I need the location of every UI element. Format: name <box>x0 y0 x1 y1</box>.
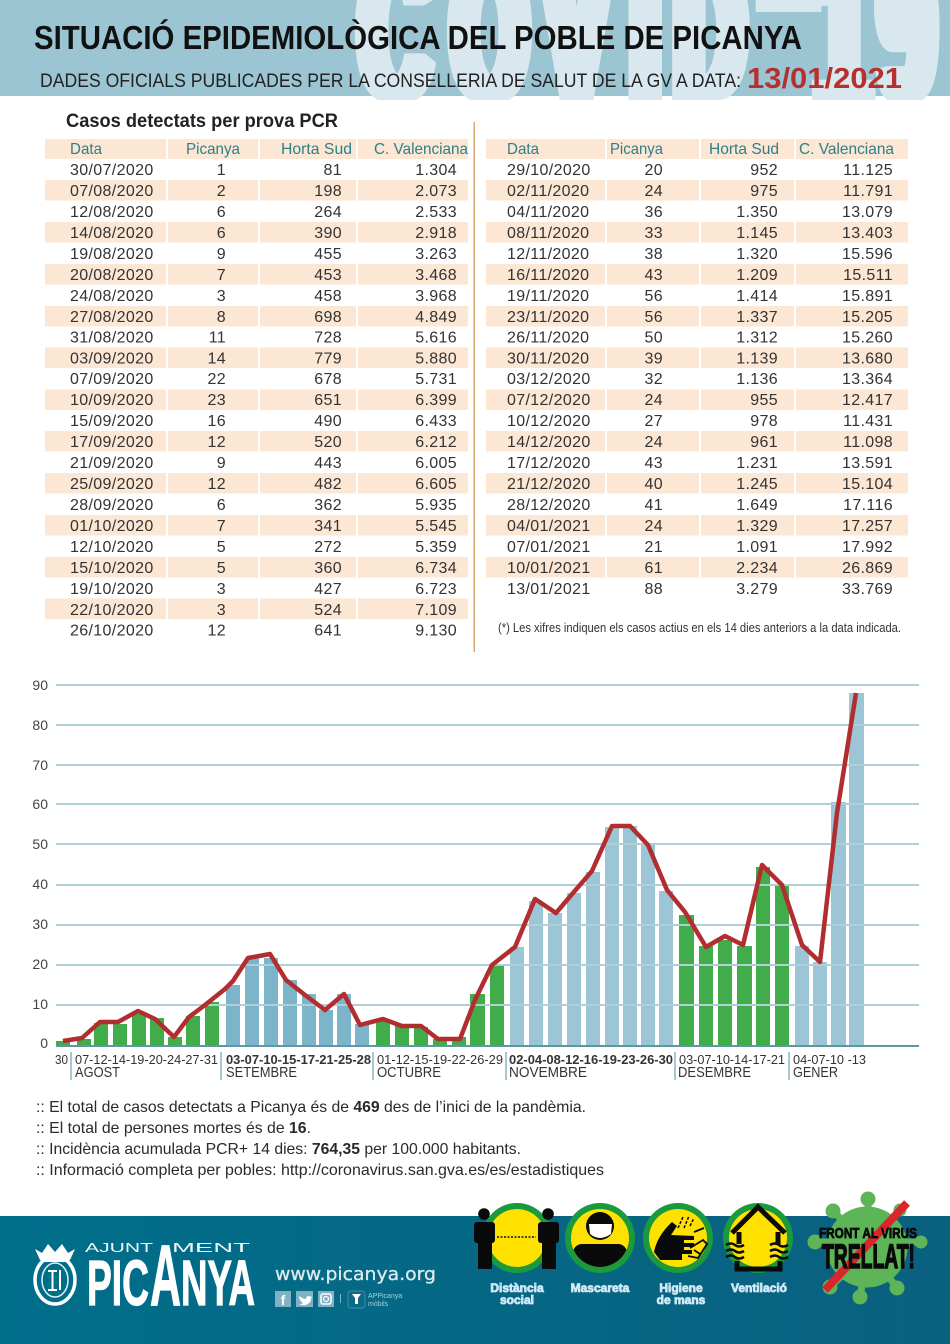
x axis labels: OCTUBRE <box>377 1064 441 1081</box>
icon: ventilation <box>723 1203 793 1273</box>
x axis labels: 30 <box>55 1052 68 1067</box>
x axis labels: SETEMBRE <box>226 1064 297 1081</box>
left table: 5 <box>217 560 226 577</box>
right table: 15.104 <box>842 476 893 493</box>
right table: 15.511 <box>843 267 893 284</box>
right table: 1.320 <box>736 246 778 263</box>
left table: 362 <box>314 497 342 514</box>
left table: 9.130 <box>415 622 457 640</box>
right table: 13/01/2021 <box>507 581 591 598</box>
logo: wordmark: NYA <box>181 1247 255 1319</box>
chart <box>32 677 919 1081</box>
left table: 698 <box>314 309 342 326</box>
left table: 3.263 <box>415 246 457 263</box>
right table: 21 <box>644 539 663 556</box>
right table: 28/12/2020 <box>507 497 591 514</box>
right table <box>486 139 908 598</box>
left table: 8 <box>217 309 226 326</box>
left table: 26/10/2020 <box>70 622 154 640</box>
right table: 43 <box>644 267 663 284</box>
right table: 20 <box>644 162 663 179</box>
left table: 390 <box>314 225 342 242</box>
right table: 13.364 <box>842 371 893 388</box>
left table: 2.533 <box>415 204 457 221</box>
background word COVID-19 <box>354 0 940 100</box>
left table: 21/09/2020 <box>70 455 154 472</box>
left table: 24/08/2020 <box>70 288 154 305</box>
left table: 25/09/2020 <box>70 476 154 493</box>
label: higiene de mans: de mans <box>657 1293 706 1307</box>
left table: 6.433 <box>415 413 457 430</box>
right table: 50 <box>644 330 663 346</box>
right table: 33 <box>644 225 663 242</box>
left table: 5.731 <box>415 371 457 388</box>
logo: wordmark: MENT <box>172 1241 251 1255</box>
icon: mask <box>565 1203 635 1274</box>
left table: 6.005 <box>415 455 457 472</box>
right table: 11.098 <box>843 434 893 451</box>
left table: 9 <box>217 455 226 472</box>
left table: 7 <box>217 267 226 284</box>
right table: 1.091 <box>736 539 778 556</box>
notes: :: Incidència acumulada PCR+ 14 dies: 764,35 per 100.000 habitants. <box>36 1141 521 1158</box>
left table: Data <box>70 141 102 158</box>
right table: 29/10/2020 <box>507 162 591 179</box>
left table: 2.918 <box>415 225 457 242</box>
left table: 2 <box>217 183 226 200</box>
right table: 15.205 <box>842 309 893 326</box>
right table: 15.596 <box>842 246 893 263</box>
left table: 17/09/2020 <box>70 434 154 451</box>
right table: 56 <box>644 288 663 305</box>
x axis labels <box>55 1052 866 1081</box>
left table: Horta Sud <box>281 141 352 158</box>
right table: 40 <box>644 476 663 493</box>
left table: 455 <box>314 246 342 263</box>
left table: 11 <box>209 330 226 346</box>
right table: 88 <box>644 581 663 598</box>
x axis labels: AGOST <box>75 1064 120 1081</box>
left table: 7.109 <box>415 602 457 619</box>
left table: 5 <box>217 539 226 556</box>
left table: 5.545 <box>415 518 457 535</box>
left table: C. Valenciana <box>374 141 468 158</box>
right table: 978 <box>750 413 778 430</box>
left table: 16 <box>208 413 226 430</box>
left table: 6.605 <box>415 476 457 493</box>
right table: 10/12/2020 <box>507 413 591 430</box>
x axis labels: 03-07-10-14-17-21 <box>679 1052 785 1067</box>
right table: C. Valenciana <box>799 141 894 158</box>
left table: 12/08/2020 <box>70 204 154 221</box>
right table: 26.869 <box>842 560 893 577</box>
right table: 32 <box>644 371 663 388</box>
right table: 11.791 <box>843 183 893 200</box>
left table: 15/09/2020 <box>70 413 154 430</box>
left table: 360 <box>314 560 342 577</box>
left table: 81 <box>324 162 342 179</box>
left table <box>45 139 468 640</box>
left table: 12 <box>208 622 226 640</box>
right table: 15.260 <box>842 330 893 346</box>
left table: 3 <box>217 288 226 305</box>
right table: 13.079 <box>842 204 893 221</box>
bars: December <box>679 867 789 1045</box>
left table: 779 <box>314 350 342 368</box>
x axis labels: GENER <box>793 1064 838 1081</box>
right table: 61 <box>644 560 663 577</box>
y axis labels: 20 <box>32 956 48 972</box>
left table: 490 <box>314 413 342 430</box>
left table: 524 <box>314 602 342 619</box>
right table: 1.649 <box>736 497 778 514</box>
social icons: f <box>281 1292 286 1308</box>
right table: 13.403 <box>842 225 893 242</box>
right table: 1.209 <box>736 267 778 284</box>
logo: wordmark: AJUNT <box>85 1241 154 1255</box>
left table: 19/10/2020 <box>70 581 154 598</box>
left table: 5.935 <box>415 497 457 514</box>
label: ventilació: Ventilació <box>731 1281 787 1295</box>
left table: 22/10/2020 <box>70 602 154 619</box>
left table: 6.723 <box>415 581 457 598</box>
left table: 6.734 <box>415 560 457 577</box>
left table: 3 <box>217 602 226 619</box>
left table: 6 <box>217 225 226 242</box>
label: distància social <box>490 1281 544 1307</box>
left table: 15/10/2020 <box>70 560 154 577</box>
x axis labels: 04-07-10 -13 <box>793 1052 866 1067</box>
notes: :: Informació completa per pobles: http://coronavirus.san.gva.es/es/estadistiques <box>36 1162 604 1179</box>
left table: 6 <box>217 497 226 514</box>
x axis labels: DESEMBRE <box>678 1064 751 1081</box>
left table: 5.880 <box>415 350 457 368</box>
logo: wordmark: PIC <box>87 1247 149 1319</box>
left table: 07/08/2020 <box>70 183 154 200</box>
right table: 975 <box>750 183 778 200</box>
y axis labels: 80 <box>32 717 48 733</box>
right table: 41 <box>644 497 663 514</box>
bars: September <box>226 958 369 1045</box>
bars: October <box>376 965 504 1045</box>
right table: 30/11/2020 <box>507 350 589 368</box>
right table: 23/11/2020 <box>507 309 589 326</box>
bars: November <box>510 826 673 1045</box>
left table: 03/09/2020 <box>70 350 154 368</box>
left table: 641 <box>314 622 342 640</box>
left table: 27/08/2020 <box>70 309 154 326</box>
right table: 24 <box>644 392 663 409</box>
x axis labels: NOVEMBRE <box>509 1064 587 1081</box>
icon: hand hygiene <box>643 1203 713 1273</box>
right table: 952 <box>750 162 778 179</box>
right table: 19/11/2020 <box>507 288 589 305</box>
logo: wordmark: A <box>150 1228 181 1324</box>
right table: 17.116 <box>843 497 893 514</box>
right table: Picanya <box>610 141 663 158</box>
left table: 01/10/2020 <box>70 518 154 535</box>
right table: 17/12/2020 <box>507 455 591 472</box>
header band <box>0 0 950 100</box>
right table: 16/11/2020 <box>507 267 589 284</box>
y axis labels: 70 <box>32 757 48 773</box>
right table: 13.591 <box>842 455 893 472</box>
left table: 12 <box>208 434 226 451</box>
right table: 04/11/2020 <box>507 204 589 221</box>
left table: 341 <box>314 518 342 535</box>
right table: 1.136 <box>736 371 778 388</box>
right table: 2.234 <box>736 560 778 577</box>
left table: 23 <box>208 392 226 409</box>
left table: 482 <box>314 476 342 493</box>
right table: 26/11/2020 <box>507 330 589 346</box>
y axis labels: 60 <box>32 796 48 812</box>
right table: 15.891 <box>842 288 893 305</box>
right table: 04/01/2021 <box>507 518 591 535</box>
left table: 198 <box>314 183 342 200</box>
left table: 427 <box>314 581 342 598</box>
left table: 443 <box>314 455 342 472</box>
right table: 17.257 <box>842 518 893 535</box>
x axis labels: 07-12-14-19-20-24-27-31 <box>75 1052 218 1067</box>
y axis labels: 30 <box>32 916 48 932</box>
logo: wordmark <box>85 1228 255 1324</box>
right table: 56 <box>644 309 663 326</box>
right table: 961 <box>750 434 778 451</box>
label: distància social: social <box>500 1293 534 1307</box>
left table: 264 <box>314 204 342 221</box>
y axis labels: 50 <box>32 836 48 852</box>
right table: 14/12/2020 <box>507 434 591 451</box>
left table: 6.212 <box>415 434 457 451</box>
right table: 07/12/2020 <box>507 392 591 409</box>
right table: 02/11/2020 <box>507 183 589 200</box>
left table: 1 <box>217 162 226 179</box>
right table: 08/11/2020 <box>507 225 589 242</box>
date: 13/01/2021 <box>747 63 902 95</box>
right table: Horta Sud <box>709 141 779 158</box>
right table: 1.145 <box>736 225 778 242</box>
right table: 1.329 <box>736 518 778 535</box>
left table: 07/09/2020 <box>70 371 154 388</box>
right table: 1.139 <box>736 350 778 368</box>
label: higiene de mans: Higiene <box>659 1281 703 1295</box>
left table: 19/08/2020 <box>70 246 154 263</box>
left table: 5.616 <box>415 330 457 346</box>
right table: 21/12/2020 <box>507 476 591 493</box>
social icons: APPicanya <box>368 1293 402 1300</box>
right table: 10/01/2021 <box>507 560 591 577</box>
icon: virus badge <box>808 1192 927 1304</box>
notes: :: El total de persones mortes és de 16. <box>36 1120 311 1137</box>
right table: 12.417 <box>842 392 893 409</box>
right table: 24 <box>644 183 663 200</box>
logo: crest <box>35 1244 75 1304</box>
icon: social distance <box>474 1203 559 1273</box>
left table: 3.968 <box>415 288 457 305</box>
right table: 36 <box>644 204 663 221</box>
social icons: mòbils <box>368 1301 389 1308</box>
left table: 10/09/2020 <box>70 392 154 409</box>
right table: 33.769 <box>842 581 893 598</box>
table heading: Casos detectats per prova PCR <box>66 111 338 132</box>
left table: 3 <box>217 581 226 598</box>
left table: 6 <box>217 204 226 221</box>
right table: 11.431 <box>843 413 893 430</box>
left table: 6.399 <box>415 392 457 409</box>
icon: virus badge: FRONT AL VIRUS <box>819 1225 917 1242</box>
left table: Picanya <box>186 141 240 158</box>
y axis labels: 10 <box>32 996 48 1012</box>
right table: 3.279 <box>736 581 778 598</box>
left table: 520 <box>314 434 342 451</box>
notes <box>36 1099 604 1179</box>
y axis labels: 90 <box>32 677 48 693</box>
left table: 31/08/2020 <box>70 330 154 346</box>
right table: 27 <box>644 413 663 430</box>
y axis labels: 0 <box>40 1035 48 1051</box>
left table: 28/09/2020 <box>70 497 154 514</box>
subtitle: DADES OFICIALS PUBLICADES PER LA CONSELLERIA DE SALUT DE LA GV A DATA: <box>40 71 741 92</box>
title: SITUACIÓ EPIDEMIOLÒGICA DEL POBLE DE PICANYA <box>34 19 802 56</box>
right table: 11.125 <box>843 162 893 179</box>
right table: 1.245 <box>736 476 778 493</box>
x axis labels: 01-12-15-19-22-26-29 <box>377 1052 503 1067</box>
left table: 272 <box>314 539 342 556</box>
right table: 07/01/2021 <box>507 539 591 556</box>
left table: 9 <box>217 246 226 263</box>
right table: 17.992 <box>842 539 893 556</box>
left table: 12/10/2020 <box>70 539 154 556</box>
left table: 4.849 <box>415 309 457 326</box>
right table: 12/11/2020 <box>507 246 589 263</box>
social icons <box>275 1291 402 1308</box>
right table: 1.350 <box>736 204 778 221</box>
notes: :: El total de casos detectats a Picanya és de 469 des de l’inici de la pandèmia. <box>36 1099 586 1116</box>
label: distància social: Distància <box>490 1281 544 1295</box>
right table: 13.680 <box>842 350 893 368</box>
y axis labels: 40 <box>32 876 48 892</box>
left table: 22 <box>208 371 226 388</box>
left table: 14 <box>208 350 226 368</box>
left table: 12 <box>208 476 226 493</box>
website: www.picanya.org <box>275 1264 436 1285</box>
right table: 1.231 <box>736 455 778 472</box>
right table: 38 <box>644 246 663 263</box>
left table: 651 <box>314 392 342 409</box>
right table: 1.414 <box>736 288 778 305</box>
left table: 728 <box>314 330 342 346</box>
left table: 14/08/2020 <box>70 225 154 242</box>
left table: 20/08/2020 <box>70 267 154 284</box>
right table: 03/12/2020 <box>507 371 591 388</box>
right table: 39 <box>644 350 663 368</box>
right table: 1.312 <box>736 330 778 346</box>
left table: 678 <box>314 371 342 388</box>
left table: 3.468 <box>415 267 457 284</box>
right table: 24 <box>644 434 663 451</box>
label: mascareta: Mascareta <box>571 1281 630 1295</box>
left table: 2.073 <box>415 183 457 200</box>
right table: 955 <box>750 392 778 409</box>
right table: 1.337 <box>736 309 778 326</box>
right table: 43 <box>644 455 663 472</box>
left table: 1.304 <box>415 162 457 179</box>
left table: 5.359 <box>415 539 457 556</box>
right table: 24 <box>644 518 663 535</box>
left table: 458 <box>314 288 342 305</box>
label: higiene de mans <box>657 1281 706 1307</box>
bars: January <box>795 693 864 1045</box>
y axis labels <box>32 677 48 1051</box>
left table: 453 <box>314 267 342 284</box>
left table: 7 <box>217 518 226 535</box>
footer band <box>0 1216 950 1344</box>
x axis labels: 03-07-10-15-17-21-25-28 <box>226 1052 371 1067</box>
line: trend <box>63 693 856 1041</box>
right table: Data <box>507 141 539 158</box>
x axis labels: 02-04-08-12-16-19-23-26-30 <box>509 1052 673 1067</box>
left table: 30/07/2020 <box>70 162 154 179</box>
bars: August <box>56 1002 219 1045</box>
